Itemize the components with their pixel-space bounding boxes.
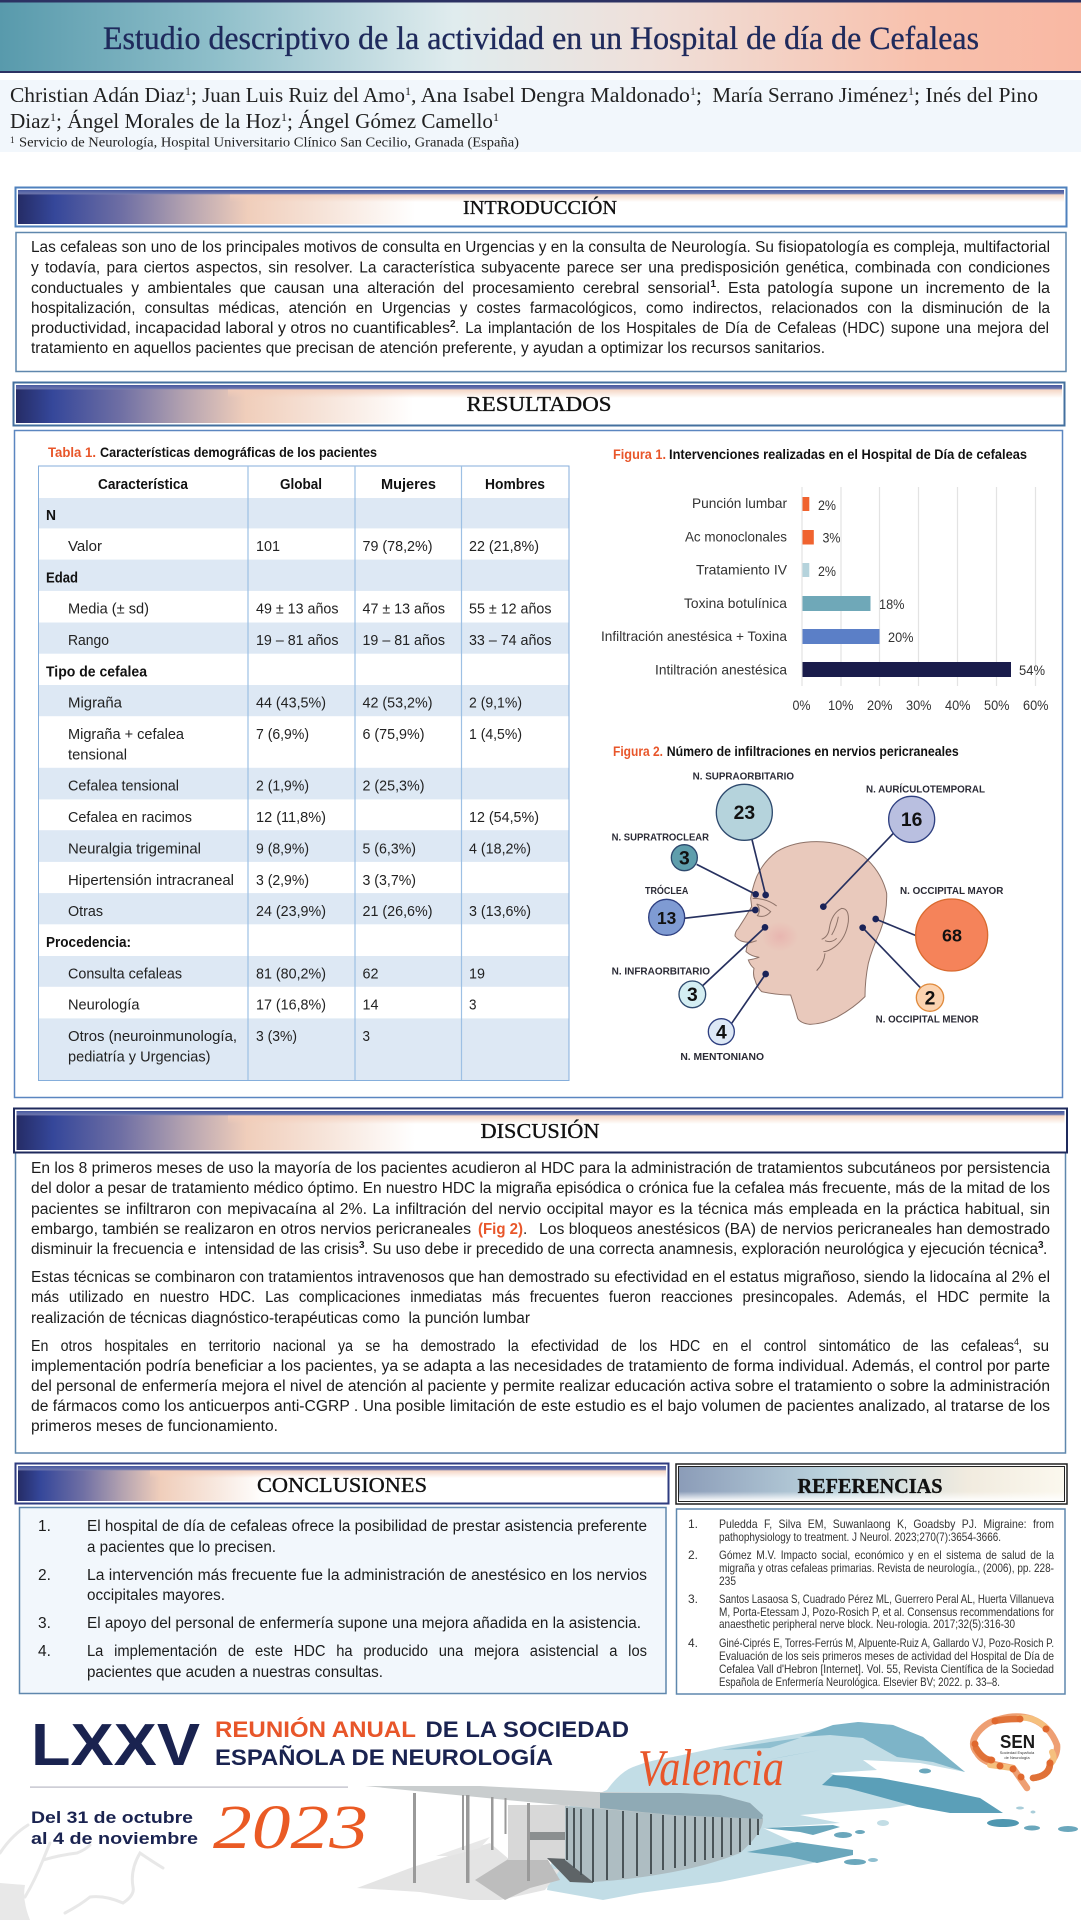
- bubble: supraorbitario 23: [716, 784, 772, 840]
- building illustration: [357, 1786, 763, 1900]
- title: Estudio descriptivo de la actividad en un Hospital de día de Cefaleas: [103, 21, 979, 57]
- table: características demográficas: Mujeres: [381, 477, 436, 493]
- panel: conclusiones list: pacientes que acuden a nuestras consultas.: [87, 1664, 383, 1681]
- bar chart: intervenciones: 0%: [792, 697, 810, 713]
- logo: SEN: [972, 1716, 1057, 1788]
- congress title: reunión anual: DE LA SOCIEDAD: [426, 1717, 629, 1742]
- panel: conclusiones list: 1.: [38, 1518, 51, 1535]
- bubble: tróclea 13: 13: [657, 908, 677, 928]
- table: características demográficas: 101: [256, 539, 280, 555]
- panel: introducción text: . La implantación de los Hospitales de Día de Cefaleas (HDC) supone una mejora del: [455, 320, 1049, 337]
- table: características demográficas: Edad: [46, 570, 78, 586]
- panel: discusión text: .: [1043, 1241, 1047, 1258]
- panel: discusión text: del dolor a pesar de tratamiento médico óptimo. En nuestro HDC la migraña episódica o crónica fue la cefalea más frecuente, más de la mitad de los: [31, 1180, 1050, 1197]
- bubble: infraorbitario 3: [679, 981, 706, 1008]
- dates: Del 31 de octubre: [31, 1808, 193, 1827]
- bubble: occipital menor 2: [916, 984, 944, 1011]
- table: características demográficas: 3 (2,9%): [256, 873, 309, 889]
- bar chart: intervenciones: 2%: [818, 497, 836, 513]
- table: características demográficas: Procedencia:: [46, 935, 131, 951]
- table: características demográficas: 19 – 81 años: [362, 633, 445, 649]
- city Valencia: Valencia: [638, 1740, 784, 1797]
- table: características demográficas: 17 (16,8%): [256, 998, 326, 1014]
- nerve labels: N. OCCIPITAL MAYOR: [900, 886, 1004, 897]
- authors block: ; Ángel Morales de la Hoz: [56, 109, 281, 133]
- table: características demográficas: Otras: [68, 904, 103, 920]
- table: características demográficas: Cefalea tensional: [68, 778, 179, 794]
- panel: introducción text: 2: [450, 319, 456, 330]
- table: características demográficas: 47 ± 13 años: [362, 602, 445, 618]
- bar chart: intervenciones: 54%: [1019, 662, 1045, 678]
- authors block: [0, 80, 1081, 152]
- icon: head profile: [735, 842, 887, 1024]
- authors block: ; Ángel Gómez Camello: [287, 109, 493, 133]
- table: características demográficas: 7 (6,9%): [256, 727, 309, 743]
- panel: discusión text: implementación podría beneficiar a los pacientes, ya se adapta a las necesidades de tratamiento de forma individual. Además, el control por parte: [31, 1358, 1050, 1375]
- bubble: aurículotemporal 16: [889, 796, 935, 842]
- table: características demográficas: Global: [280, 477, 322, 493]
- panel: discusión text: Los bloqueos anestésicos (BA) de nervios pericraneales han demostrado: [539, 1221, 1050, 1238]
- table: características demográficas: 55 ± 12 años: [469, 602, 552, 618]
- logo: SEN: SEN: [1000, 1732, 1035, 1752]
- panel: introducción text: [16, 232, 1066, 372]
- panel: conclusiones list: [20, 1508, 666, 1694]
- heading: conclusiones: [16, 1464, 668, 1504]
- nerve points: [752, 891, 879, 977]
- table: características demográficas: Tipo de cefalea: [46, 664, 148, 680]
- table: características demográficas: Neuralgia trigeminal: [68, 842, 201, 858]
- dates: al 4 de noviembre: [31, 1829, 198, 1848]
- table: características demográficas: 62: [362, 966, 378, 982]
- bubble: supraorbitario 23: 23: [734, 803, 755, 824]
- bar chart: intervenciones: 30%: [906, 697, 932, 713]
- table caption: Tabla 1.: [48, 445, 96, 460]
- heading: resultados: [14, 382, 1064, 426]
- authors block: Servicio de Neurología, Hospital Universitario Clínico San Cecilio, Granada (España): [19, 136, 519, 150]
- panel: introducción text: 1: [710, 279, 716, 290]
- table: características demográficas: 24 (23,9%): [256, 904, 326, 920]
- authors block: 1: [493, 110, 499, 124]
- table: características demográficas: Consulta cefaleas: [68, 966, 182, 982]
- congress title: LXXV: LXXV: [31, 1712, 200, 1778]
- table: características demográficas: 79 (78,2%): [362, 539, 432, 555]
- table: características demográficas: 4 (18,2%): [469, 842, 531, 858]
- bubble: occipital mayor 68: 68: [942, 926, 962, 946]
- bubble: supratroclear 3: 3: [679, 848, 690, 869]
- table: características demográficas: 2 (25,3%): [362, 778, 424, 794]
- bar chart: intervenciones: Punción lumbar: [692, 495, 787, 511]
- heading: discusión: [14, 1108, 1067, 1152]
- bar chart: intervenciones: Intiltración anestésica: [655, 662, 787, 678]
- title banner: [0, 0, 1081, 73]
- table: características demográficas: Hombres: [485, 477, 545, 493]
- bubble: mentoniano 4: [708, 1019, 734, 1045]
- panel: discusión text: .: [523, 1221, 527, 1238]
- panel: discusión text: En otros hospitales en territorio nacional ya se ha demostrado la efectividad de los HDC en el control sintomático de las cefaleas: [31, 1338, 1014, 1355]
- panel: referencias list: 2.: [688, 1548, 698, 1562]
- panel: discusión text: de fármacos como los anticuerpos anti-CGRP . Una posible limitación de este estudio es el bajo volumen de pacientes analizado, al tratarse de los: [31, 1398, 1050, 1415]
- heading: introducción: INTRODUCCIÓN: [463, 195, 617, 219]
- table: características demográficas: Característica: [98, 477, 189, 493]
- bar chart: intervenciones: 60%: [1023, 697, 1048, 713]
- panel: referencias list: 1.: [688, 1517, 698, 1531]
- panel: discusión text: realización de técnicas diagnóstico-terapéuticas como la punción lumbar: [31, 1310, 530, 1327]
- bar chart: intervenciones: 3%: [822, 530, 840, 546]
- nerve labels: N. OCCIPITAL MENOR: [876, 1015, 979, 1026]
- heading: referencias: REFERENCIAS: [798, 1474, 943, 1498]
- panel: introducción text: productividad, incapacidad laboral y otros no cuantificables: [31, 320, 450, 337]
- bar chart: intervenciones: 10%: [828, 697, 854, 713]
- table: características demográficas: 1 (4,5%): [469, 727, 522, 743]
- figure 1 caption: Figura 1.: [613, 447, 666, 462]
- panel: conclusiones list: 3.: [38, 1615, 51, 1632]
- panel: discusión text: 3: [1038, 1240, 1044, 1251]
- panel: discusión text: 4: [1014, 1337, 1019, 1347]
- panel: conclusiones list: a pacientes que lo precisen.: [87, 1539, 276, 1556]
- table: características demográficas: 49 ± 13 años: [256, 602, 338, 618]
- authors block: Diaz: [10, 109, 50, 133]
- panel: conclusiones list: occipitales mayores.: [87, 1587, 225, 1604]
- table: características demográficas: [38, 466, 569, 1080]
- bubble: supratroclear 3: [671, 845, 697, 871]
- figure 2 caption: Figura 2.: [613, 744, 663, 759]
- bar chart: intervenciones: 40%: [945, 697, 970, 713]
- table: características demográficas: 6 (75,9%): [362, 727, 424, 743]
- table: características demográficas: pediatría y Urgencias): [68, 1050, 210, 1066]
- bar chart: intervenciones: 20%: [888, 629, 914, 645]
- nerve labels: N. AURÍCULOTEMPORAL: [866, 783, 985, 796]
- bar chart: intervenciones: 20%: [867, 697, 892, 713]
- connector lines: [684, 833, 921, 1023]
- authors block: 1: [405, 84, 411, 98]
- authors block: Christian Adán Diaz: [10, 83, 185, 107]
- panel: conclusiones list: La intervención más frecuente fue la administración de anestésico en los nervios: [87, 1567, 647, 1584]
- decorative map rivers: [0, 1825, 163, 1920]
- table: características demográficas: 3 (3%): [256, 1029, 297, 1045]
- panel: referencias list: 3.: [688, 1592, 698, 1606]
- table: características demográficas: N: [46, 508, 56, 524]
- panel: introducción text: y todavía, para ciertos aspectos, sin resolver. La característica subyacente parece ser una predisposición genética, combinada con condiciones: [31, 260, 1050, 276]
- panel: discusión text: disminuir la frecuencia e intensidad de las crisis: [31, 1241, 359, 1258]
- panel: referencias list: anaesthetic peripheral nerve block. Neu-rologia. 2017;32(5):316-30: [719, 1617, 1015, 1631]
- congress title: reunión anual: [215, 1717, 629, 1770]
- authors block: , Ana Isabel Dengra Maldonado: [411, 83, 690, 107]
- panel: conclusiones list: El hospital de día de cefaleas ofrece la posibilidad de prestar asistencia preferente: [87, 1518, 647, 1535]
- logo: SEN: de Neurología: [1004, 1755, 1030, 1760]
- heading: conclusiones: CONCLUSIONES: [257, 1473, 427, 1497]
- panel: introducción text: . Esta patología supone un incremento de la: [716, 280, 1050, 297]
- nerve labels: [612, 771, 1004, 1063]
- table: características demográficas: 81 (80,2%): [256, 966, 326, 982]
- bar chart: intervenciones: 2%: [818, 563, 836, 579]
- table: características demográficas: Hipertensión intracraneal: [68, 873, 234, 889]
- authors block: 1: [10, 135, 14, 145]
- authors block: 1: [690, 84, 696, 98]
- congress title: reunión anual: REUNIÓN ANUAL: [215, 1717, 416, 1742]
- table: características demográficas: 44 (43,5%): [256, 696, 326, 712]
- authors block: 1: [281, 110, 287, 124]
- panel: discusión text: [16, 1152, 1066, 1453]
- panel: discusión text: pacientes se infiltraron con mepivacaína al 2%. La infiltración del nervio occipital mayor es la técnica más empleada en la práctica habitual, sin: [31, 1201, 1050, 1218]
- congress title: reunión anual: ESPAÑOLA DE NEUROLOGÍA: [215, 1745, 553, 1770]
- table: características demográficas: 9 (8,9%): [256, 842, 309, 858]
- table: características demográficas: 3: [362, 1029, 370, 1045]
- panel: introducción text: hospitalización, consultas médicas, atención en Urgencias y costes farmacológicos, como indirectos, relacionados con la disminución de la: [31, 300, 1050, 317]
- bar chart: intervenciones: [601, 487, 1048, 713]
- authors block: ; María Serrano Jiménez: [696, 83, 908, 107]
- table: características demográficas: 3: [469, 998, 476, 1014]
- heading: discusión: DISCUSIÓN: [480, 1119, 600, 1143]
- panel: referencias list: Española de Enfermería Neurológica. Elsevier BV; 2022. p. 33–8.: [719, 1675, 1000, 1689]
- authors block: 1: [908, 84, 914, 98]
- nerve labels: N. MENTONIANO: [680, 1052, 764, 1063]
- table: características demográficas: 19 – 81 años: [256, 633, 338, 649]
- panel: conclusiones list: La implementación de este HDC ha producido una mejora asistencial a los: [87, 1643, 647, 1660]
- panel: conclusiones list: 2.: [38, 1567, 51, 1584]
- panel: introducción text: Las cefaleas son uno de los principales motivos de consulta en Urgencias y en la consulta de Neurología. Su fisiopatología es compleja, multifactorial: [31, 239, 1050, 256]
- panel: discusión text: En los 8 primeros meses de uso la mayoría de los pacientes acudieron al HDC para la administración de tratamientos subcutáneos por persistencia: [31, 1160, 1050, 1177]
- bar chart: intervenciones: 50%: [984, 697, 1010, 713]
- table: características demográficas: 12 (54,5%): [469, 810, 539, 826]
- bubble: infraorbitario 3: 3: [687, 985, 698, 1006]
- panel: referencias list: pathophysiology to treatment. J Neurol. 2023;270(7):3654-3666.: [719, 1530, 1001, 1544]
- bubble: aurículotemporal 16: 16: [901, 810, 923, 831]
- panel: discusión text: primeros meses de funcionamiento.: [31, 1418, 278, 1435]
- table: características demográficas: 19: [469, 966, 485, 982]
- authors block: ; Inés del Pino: [914, 83, 1038, 107]
- nerve labels: N. SUPRAORBITARIO: [693, 771, 794, 782]
- table: características demográficas: 21 (26,6%): [362, 904, 432, 920]
- panel: discusión text: embargo, también se realizaron en otros nervios pericraneales: [31, 1221, 471, 1238]
- table: características demográficas: Otros (neuroinmunología,: [68, 1029, 237, 1045]
- panel: discusión text: ,: [1018, 1338, 1022, 1355]
- authors block: 1: [50, 110, 56, 124]
- bar chart: intervenciones: Ac monoclonales: [685, 528, 787, 544]
- panel: introducción text: conductuales y ambientales que causan una alteración del procesamiento cerebral sensorial: [31, 280, 710, 297]
- bubble: occipital menor 2: 2: [925, 988, 935, 1009]
- table: características demográficas: Cefalea en racimos: [68, 810, 192, 826]
- bar chart: intervenciones: Toxina botulínica: [684, 595, 787, 611]
- panel: conclusiones list: 4.: [38, 1643, 51, 1660]
- panel: referencias list: [676, 1509, 1065, 1694]
- figure 2: head diagram: [612, 771, 1004, 1063]
- heading: referencias: [676, 1464, 1067, 1504]
- table: características demográficas: 3 (3,7%): [362, 873, 416, 889]
- table: características demográficas: 2 (1,9%): [256, 778, 309, 794]
- table: características demográficas: 42 (53,2%): [362, 696, 432, 712]
- table: características demográficas: Neurología: [68, 998, 140, 1014]
- authors block: 1: [185, 84, 191, 98]
- table: características demográficas: tensional: [68, 748, 127, 764]
- table: características demográficas: 22 (21,8%): [469, 539, 539, 555]
- panel: introducción text: tratamiento en aquellos pacientes que precisan de atención preferente, y ayudan a optimizar los recursos sanitarios.: [31, 340, 825, 357]
- panel: discusión text: 3: [359, 1240, 365, 1251]
- table: características demográficas: 33 – 74 años: [469, 633, 552, 649]
- panel: resultados: [14, 430, 1062, 1098]
- bar chart: intervenciones: Tratamiento IV: [696, 562, 788, 578]
- banner: congress footer: [0, 1712, 1078, 1920]
- table: características demográficas: 2 (9,1%): [469, 696, 522, 712]
- authors block: ; Juan Luis Ruiz del Amo: [191, 83, 405, 107]
- bubble: tróclea 13: [649, 899, 685, 935]
- table: características demográficas: 3 (13,6%): [469, 904, 531, 920]
- table: características demográficas: 12 (11,8%): [256, 810, 326, 826]
- bar chart: intervenciones: 18%: [879, 596, 904, 612]
- year 2023: 2023: [213, 1794, 368, 1862]
- panel: referencias list: 4.: [688, 1636, 698, 1650]
- panel: discusión text: Estas técnicas se combinaron con tratamientos intravenosos que han demostrado su efectividad en el estatus migrañoso, siendo la lidocaína al 2% el: [31, 1269, 1050, 1286]
- table caption: Características demográficas de los pacientes: [100, 445, 377, 460]
- bar chart: intervenciones: Infiltración anestésica + Toxina: [601, 628, 787, 644]
- figure 1 caption: Intervenciones realizadas en el Hospital de Día de cefaleas: [669, 447, 1027, 462]
- panel: discusión text: su: [1033, 1338, 1049, 1355]
- nerve labels: N. SUPRATROCLEAR: [612, 833, 709, 844]
- table: características demográficas: Migraña: [68, 696, 123, 712]
- table: características demográficas: Valor: [68, 539, 102, 555]
- table: características demográficas: Migraña + cefalea: [68, 727, 185, 743]
- panel: discusión text: (Fig 2): [478, 1221, 523, 1238]
- dates: [31, 1808, 198, 1848]
- panel: discusión text: más utilizado en nuestro HDC. Las complicaciones inmediatas más frecuentes fueron reacciones presincopales. Además, el HDC permite la: [31, 1289, 1050, 1306]
- nerve labels: TRÓCLEA: [645, 884, 689, 897]
- table: características demográficas: 14: [362, 998, 378, 1014]
- panel: discusión text: . Su uso debe ir precedido de una correcta anamnesis, exploración neurológica y ejecución técnica: [364, 1241, 1038, 1258]
- nerve labels: N. INFRAORBITARIO: [612, 967, 710, 978]
- bubble: occipital mayor 68: [916, 899, 988, 971]
- table: características demográficas: 5 (6,3%): [362, 842, 416, 858]
- figure 2 caption: Número de infiltraciones en nervios pericraneales: [667, 744, 959, 759]
- table: características demográficas: Rango: [68, 633, 109, 649]
- panel: referencias list: 235: [719, 1574, 736, 1588]
- panel: conclusiones list: El apoyo del personal de enfermería supone una mejora añadida en la asistencia.: [87, 1615, 641, 1632]
- watercolor wash: [547, 1722, 1078, 1900]
- bubble: mentoniano 4: 4: [716, 1022, 727, 1043]
- panel: discusión text: del personal de enfermería mejora el nivel de atención al paciente y permite realizar educación activa sobre el tratamiento o sobre la administración: [31, 1378, 1050, 1395]
- heading: resultados: RESULTADOS: [466, 392, 612, 416]
- logo: SEN: Sociedad Española: [1000, 1750, 1035, 1755]
- table: características demográficas: Media (± sd): [68, 602, 149, 618]
- heading: introducción: [16, 188, 1066, 226]
